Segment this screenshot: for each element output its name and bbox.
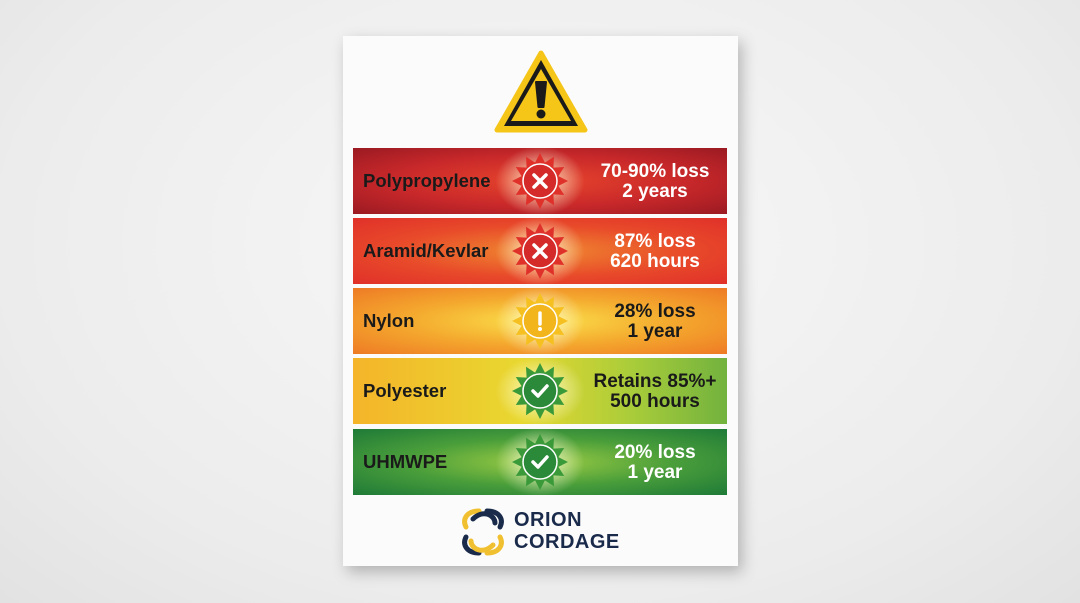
card xyxy=(343,36,738,566)
row: Nylon: 1 year xyxy=(628,321,682,342)
row: Nylon xyxy=(353,288,727,354)
row: UHMWPE: UHMWPE xyxy=(363,451,447,472)
text: brand: CORDAGE xyxy=(514,531,620,553)
icon: warning triangle xyxy=(494,50,588,132)
row: Polyester: 500 hours xyxy=(610,391,700,412)
row: Aramid/Kevlar: Aramid/Kevlar xyxy=(363,240,488,261)
row: UHMWPE: 20% loss xyxy=(614,442,696,463)
row: Polypropylene: 70-90% loss xyxy=(601,161,709,182)
row: Aramid/Kevlar: 620 hours xyxy=(610,251,700,272)
row: Polypropylene: 2 years xyxy=(622,181,688,202)
row: Aramid/Kevlar xyxy=(353,218,727,284)
row: Aramid/Kevlar: 87% loss xyxy=(614,231,696,252)
icon: green sun check xyxy=(512,363,568,419)
icon: red sun x xyxy=(512,223,568,279)
row: Polyester: Polyester xyxy=(363,380,446,401)
row: UHMWPE: 1 year xyxy=(628,462,682,483)
row: Polypropylene: Polypropylene xyxy=(363,170,490,191)
row: Polyester xyxy=(353,358,727,424)
text: brand: ORION xyxy=(514,509,582,531)
row: Polyester: Retains 85%+ xyxy=(593,371,717,392)
icon: red sun x xyxy=(512,153,568,209)
row: Polypropylene xyxy=(353,148,727,214)
icon: yellow sun ! xyxy=(512,293,568,349)
icon: logo knot xyxy=(462,508,504,556)
row: UHMWPE xyxy=(353,429,727,495)
logo xyxy=(462,508,620,556)
row: Nylon: 28% loss xyxy=(614,301,696,322)
text: brand xyxy=(514,509,620,553)
icon: green sun check xyxy=(512,434,568,490)
row: Nylon: Nylon xyxy=(363,310,414,331)
